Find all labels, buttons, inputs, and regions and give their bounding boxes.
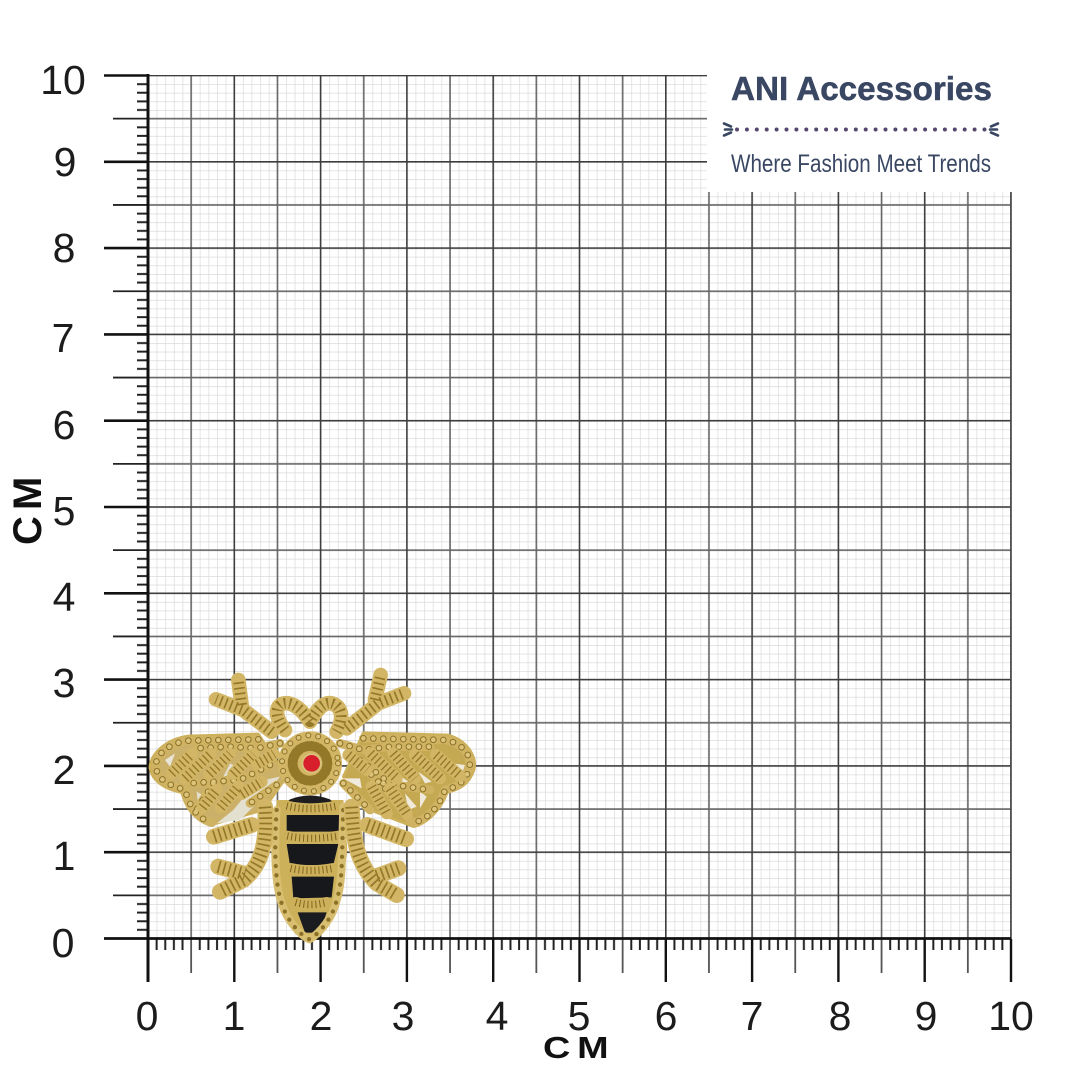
y axis numbers: 5	[53, 488, 75, 534]
y axis numbers: 8	[53, 225, 75, 271]
y axis numbers: 4	[53, 574, 75, 620]
y axis unit label: CM	[6, 477, 50, 545]
red gem	[303, 755, 320, 772]
legs	[214, 807, 406, 895]
x axis numbers: 6	[655, 993, 677, 1039]
brand name: ANI Accessories	[731, 70, 992, 107]
x axis numbers: 9	[915, 993, 937, 1039]
x axis numbers: 5	[568, 993, 590, 1039]
x axis numbers: 2	[310, 993, 332, 1039]
y axis numbers: 3	[53, 660, 75, 706]
antennae and head loops	[216, 675, 404, 732]
wing ribs	[172, 753, 460, 813]
head	[278, 731, 342, 795]
graph paper grid	[148, 75, 1011, 939]
dotted ornament divider	[724, 124, 998, 136]
gold beading	[156, 738, 470, 823]
x axis numbers: 1	[223, 993, 245, 1039]
x axis numbers: 7	[741, 993, 763, 1039]
x axis with ticks	[104, 938, 1011, 982]
x axis numbers: 0	[136, 993, 158, 1039]
x axis numbers: 3	[392, 993, 414, 1039]
y axis numbers: 10	[40, 57, 86, 103]
y axis numbers: 0	[52, 920, 74, 966]
y axis numbers: 7	[52, 315, 74, 361]
x axis numbers: 8	[829, 993, 851, 1039]
x axis unit label: CM	[543, 1031, 609, 1065]
bee brooch	[150, 675, 475, 941]
y axis with ticks	[104, 74, 148, 982]
y axis numbers	[40, 57, 86, 966]
left wing	[150, 734, 287, 825]
y axis numbers: 1	[53, 833, 75, 879]
y axis numbers: 2	[53, 747, 75, 793]
y axis numbers: 9	[54, 139, 76, 185]
y axis numbers: 6	[53, 402, 75, 448]
brand logo panel	[707, 60, 1080, 192]
abdomen	[273, 795, 347, 941]
tagline: Where Fashion Meet Trends	[731, 150, 991, 178]
x axis numbers: 4	[486, 993, 508, 1039]
x axis numbers	[136, 993, 1034, 1039]
x axis numbers: 10	[988, 993, 1034, 1039]
right wing	[343, 733, 475, 827]
